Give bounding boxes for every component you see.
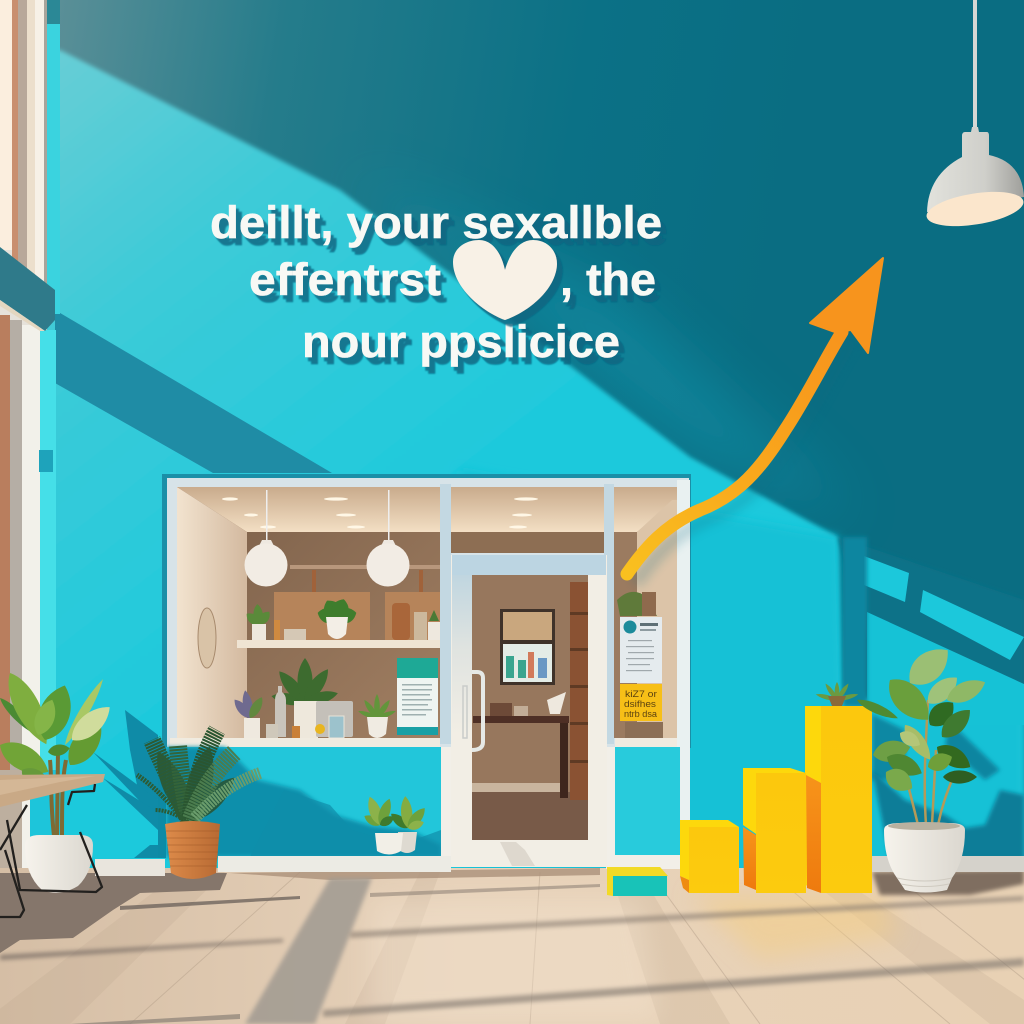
shelf items bbox=[244, 596, 440, 640]
floor bbox=[0, 868, 1024, 1024]
small plants by door bbox=[362, 795, 429, 854]
poster yellow: dsifhes bbox=[624, 699, 657, 709]
awning beam bbox=[0, 247, 55, 331]
line 3: nour ppslicice bbox=[302, 316, 620, 367]
pendant globe lamp 1 bbox=[244, 490, 288, 586]
white planter bbox=[25, 835, 93, 893]
large plant right bbox=[855, 640, 989, 892]
fern in terracotta pot bbox=[137, 730, 260, 879]
sunlit wall band bbox=[40, 50, 1024, 880]
poster white bbox=[620, 617, 662, 683]
desk bbox=[473, 692, 569, 798]
right window interior bbox=[614, 487, 677, 738]
left window interior bbox=[177, 487, 440, 738]
door glass and back room bbox=[472, 575, 588, 840]
baseboard bbox=[95, 856, 1024, 876]
line 2 left: effentrst bbox=[249, 254, 441, 305]
bar 1 bbox=[680, 820, 739, 893]
shadow band left bbox=[55, 310, 332, 473]
succulent on bar bbox=[815, 682, 859, 706]
pendant lamp bbox=[924, 0, 1024, 232]
planter bbox=[884, 823, 965, 892]
floor shadows bbox=[0, 873, 227, 953]
pendant globe lamp 2 bbox=[366, 490, 410, 586]
lower shelf items bbox=[231, 658, 397, 738]
small block bbox=[607, 867, 668, 896]
storefront bbox=[162, 474, 691, 869]
left table bbox=[0, 774, 105, 917]
door handle bbox=[463, 672, 483, 750]
headline text bbox=[210, 197, 662, 367]
left plant shadows on wall bbox=[125, 710, 158, 800]
framed chart bbox=[500, 609, 555, 685]
wooden boards bbox=[274, 592, 370, 640]
leaf shadow on door bbox=[500, 842, 535, 866]
lower panel left bbox=[166, 747, 441, 857]
icon: heart bbox=[453, 240, 557, 320]
plant shadow on right wall bbox=[872, 714, 905, 780]
poster yellow bbox=[620, 684, 662, 721]
bar 3 bbox=[805, 706, 872, 893]
line 1: deillt, your sexallble bbox=[210, 197, 662, 248]
wall clock bbox=[198, 608, 216, 668]
line 2 right: , the bbox=[560, 254, 656, 305]
teal poster bbox=[397, 658, 438, 735]
left window wall bbox=[0, 0, 60, 880]
bar 2 bbox=[743, 768, 806, 893]
poster yellow: kiZ7 or bbox=[625, 689, 657, 699]
mullions and sills bbox=[440, 484, 614, 744]
left plant bbox=[0, 667, 117, 893]
door bbox=[451, 555, 607, 867]
poster yellow: ntrb dsa bbox=[624, 709, 657, 719]
bar chart blocks bbox=[607, 706, 872, 896]
storefront outer frame bbox=[162, 474, 691, 748]
shelf bbox=[237, 640, 440, 648]
arrow bbox=[627, 258, 883, 583]
right wall dark wedge and window shadow bbox=[838, 537, 1024, 700]
lower panel right bbox=[615, 747, 680, 855]
transom bbox=[451, 487, 604, 553]
